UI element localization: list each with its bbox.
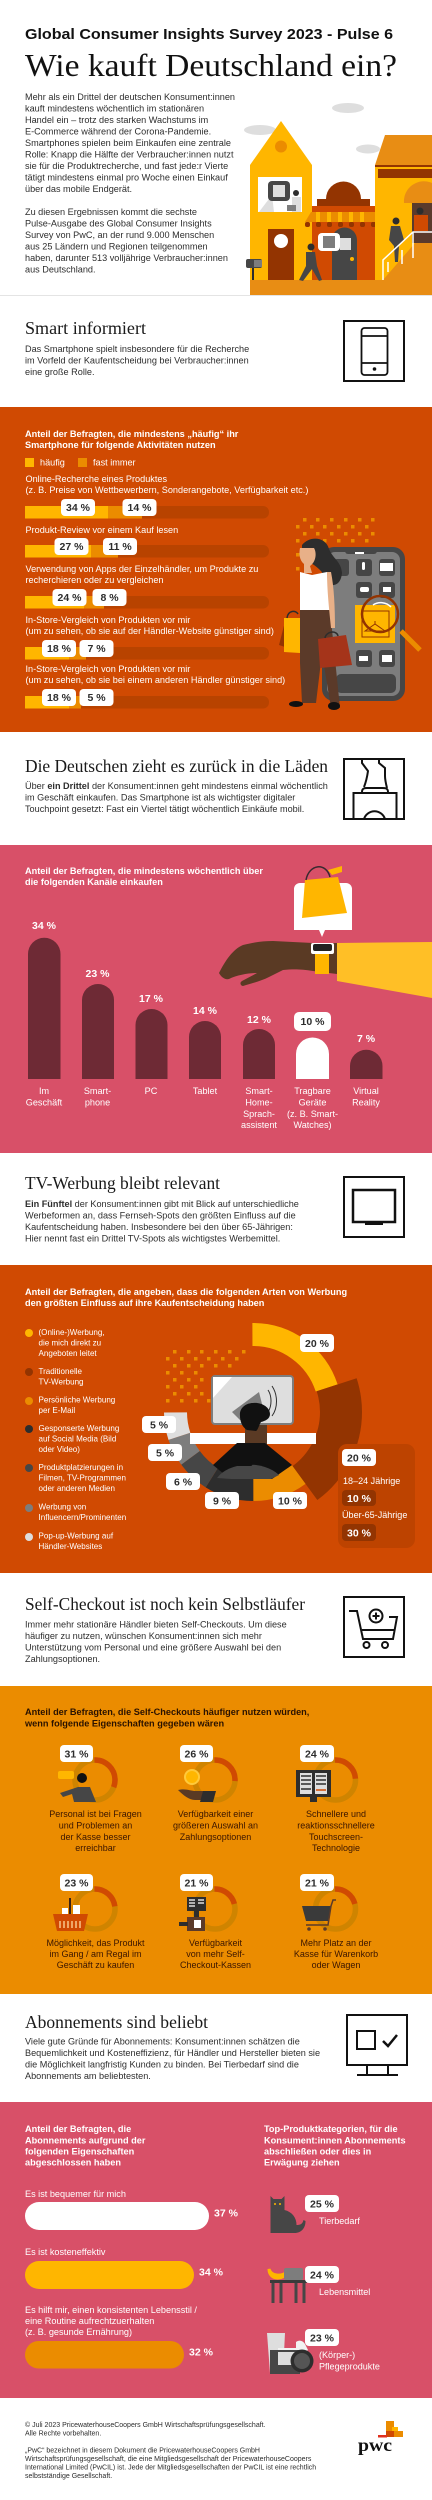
bar: convenience 37 %: Es ist bequemer für mich: [25, 2189, 126, 2199]
bar: cost effective 34 %: Es ist kosteneffektiv: [25, 2247, 106, 2257]
footer: legal notice: „PwC“ bezeichnet in diesem Dokument die PricewaterhouseCoopers GmbH: [25, 2448, 260, 2454]
bar chart: weekly channels: Reality: [352, 1098, 380, 1108]
text block: [25, 781, 328, 814]
text block: introduction: haben, darunter 513 volljährige Verbraucher:innen: [25, 253, 228, 263]
legend: advertising types: Filmen, TV-Programmen: [38, 1474, 126, 1482]
legend: advertising types: Werbung von: [38, 1502, 86, 1512]
bar chart: weekly channels: Im: [39, 1086, 49, 1096]
bar row: online research: Online-Recherche eines Produktes: [26, 474, 167, 484]
legend: advertising types: auf Social Media (Bild: [38, 1434, 116, 1444]
chart: advertising donut with person: [142, 1324, 341, 1509]
text block: introduction: Survey von PwC, an der rund 9.000 Menschen: [25, 230, 214, 240]
text block: Ein Fünftel der Konsument:innen gibt mit Blick auf unterschiedliche: [25, 1199, 299, 1209]
right heading: Erwägung ziehen: [264, 2158, 340, 2168]
heading: TV-Werbung bleibt relevant: [25, 1173, 220, 1193]
bar chart: weekly channels: phone: [85, 1098, 110, 1108]
panel heading: die folgenden Kanäle einkaufen: [25, 877, 163, 887]
item: buy in aisle 23 %: 23 %: [65, 1878, 89, 1890]
left heading: [25, 2124, 146, 2168]
panel: back to the stores: [25, 756, 404, 819]
text block: im Vorfeld der Kaufentscheidung bei Verbraucher:innen: [25, 356, 249, 366]
footer: legal notice: © Juli 2023 PricewaterhouseCoopers GmbH Wirtschaftsprüfungsgesellschaft.: [25, 2421, 266, 2429]
legend: advertising types: oder Video): [38, 1445, 80, 1454]
item: staff support 31 %: 31 %: [65, 1748, 89, 1760]
text block: Bequemlichkeit und Kosteneffizienz, für Händler und Hersteller bieten sie: [25, 2048, 320, 2058]
left heading: Anteil der Befragten, die: [25, 2124, 131, 2134]
heading: Smart informiert: [25, 318, 146, 338]
text block: häufiger zu nutzen, wünschen Konsument:innen sich mehr: [25, 1631, 262, 1641]
category: pet supplies with cat icon: 25 %: [310, 2198, 335, 2210]
bar: routine 32 %: 32 %: [189, 2346, 214, 2358]
bar chart: weekly channels: Virtual: [353, 1086, 379, 1096]
bar row: in-store comparison other retailer: (um zu sehen, ob sie bei einem anderen Händler günstiger sind): [26, 675, 285, 685]
legend: advertising types: TV-Werbung: [38, 1378, 84, 1386]
category: groceries with table icon: Lebensmittel: [319, 2287, 370, 2297]
panel heading: Anteil der Befragten, die mindestens wöchentlich über: [25, 866, 263, 876]
category: groceries with table icon: 24 %: [310, 2270, 335, 2282]
text block: introduction: [25, 92, 235, 274]
item: more space 21 %: Kasse für Warenkorb: [294, 1949, 378, 1959]
bar chart: weekly channels: 12 %: [247, 1014, 272, 1026]
bar chart: weekly channels: 10 %: [301, 1016, 325, 1028]
panel heading: Anteil der Befragten, die angeben, dass die folgenden Arten von Werbung: [25, 1287, 347, 1297]
bar chart: weekly channels: Smart-: [245, 1086, 273, 1096]
panel: advertising influence: [0, 1265, 432, 1573]
panel heading: wenn folgende Eigenschaften gegeben wären: [24, 1718, 224, 1728]
text block: Kaufentscheidung haben. Insbesondere bei den über 65-Jährigen:: [25, 1222, 293, 1232]
category: pet supplies with cat icon: [270, 2195, 360, 2233]
item: buy in aisle 23 %: Geschäft zu kaufen: [57, 1960, 134, 1970]
bar chart: weekly channels: Tablet: [193, 1086, 218, 1096]
footer: legal notice: Alle Rechte vorbehalten.: [25, 2430, 101, 2438]
chart: advertising donut with person: 10 %: [278, 1496, 303, 1508]
text block: introduction: tätigt mindestens einmal pro Woche einen Einkauf: [25, 172, 228, 182]
bar row: in-store comparison website: 18 %: [47, 643, 72, 655]
bar: convenience 37 %: [25, 2189, 239, 2230]
right heading: abschließen oder dies in: [264, 2146, 372, 2156]
illustration: shopping street: [244, 103, 432, 295]
bar row: product reviews: 27 %: [60, 541, 84, 553]
text block: Abonnements am beliebtesten.: [25, 2071, 151, 2081]
bar chart: weekly channels: Geräte: [299, 1098, 326, 1108]
legend: advertising types: Persönliche Werbung: [38, 1396, 115, 1404]
panel heading: [25, 1287, 347, 1308]
bar chart: weekly channels: (z. B. Smart-: [287, 1109, 338, 1119]
text block: Das Smartphone spielt insbesondere für die Recherche: [25, 344, 249, 354]
text block: introduction: Smartphones spielen beim Einkaufen eine zentrale: [25, 138, 231, 148]
panel heading: den größten Einfluss auf ihre Kaufentscheidung haben: [25, 1298, 265, 1308]
item: touchscreen 24 %: Schnellere und: [306, 1809, 366, 1819]
text block: [25, 1620, 287, 1664]
item: payment options 26 %: [173, 1745, 258, 1842]
bar chart: weekly channels: 7 %: [357, 1033, 376, 1045]
bar chart: weekly channels: assistent: [241, 1120, 277, 1130]
legend: advertising types: Influencern/Prominenten: [38, 1513, 126, 1522]
panel heading: [24, 1707, 309, 1728]
bar row: retailer apps: recherchieren oder zu vergleichen: [26, 575, 163, 585]
bar row: retailer apps: [25, 564, 269, 608]
icon: shop with bag: [344, 759, 404, 819]
bar chart: weekly channels: Smart-: [84, 1086, 111, 1096]
text block: im Geschäft einkaufen. Das Smartphone ist als wichtigster digitaler: [25, 792, 295, 802]
bar row: product reviews: 11 %: [108, 541, 132, 553]
panel: smartphone activities: [0, 407, 432, 732]
right heading: [264, 2124, 406, 2168]
item: payment options 26 %: 26 %: [185, 1748, 209, 1760]
item: staff support 31 %: und Problemen an: [59, 1820, 132, 1830]
panel heading: [25, 429, 239, 450]
bar row: online research: [25, 474, 308, 518]
footer: legal notice: selbstständige Gesellschaft.: [25, 2473, 112, 2480]
bar row: online research: 14 %: [128, 502, 152, 514]
item: more checkouts 21 %: Checkout-Kassen: [180, 1960, 251, 1970]
item: more space 21 %: 21 %: [305, 1878, 330, 1890]
legend: advertising types: Gesponserte Werbung: [38, 1424, 119, 1433]
legend: fast immer: [93, 458, 136, 468]
footer: legal notice: Wirtschaftsprüfungsgesellschaft, die eine Mitgliedsgesellschaft der PricewaterhouseCoopers: [25, 2456, 312, 2463]
heading: Die Deutschen zieht es zurück in die Läden: [25, 756, 328, 776]
item: touchscreen 24 %: reaktionsschnellere: [297, 1820, 375, 1830]
panel heading: Anteil der Befragten, die Self-Checkouts häufiger nutzen würden,: [25, 1707, 309, 1717]
item: more checkouts 21 %: 21 %: [185, 1878, 209, 1890]
legend: advertising types: per E-Mail: [38, 1406, 75, 1415]
right heading: Konsument:innen Abonnements: [264, 2136, 406, 2146]
category: care products with cosmetics icon: (Körper-): [319, 2350, 355, 2360]
text block: introduction: kauft mindestens wöchentlich im stationären: [25, 104, 204, 114]
item: payment options 26 %: größeren Auswahl an: [173, 1820, 258, 1830]
bar chart: weekly channels: Home-: [245, 1098, 273, 1108]
bar: routine 32 %: Es hilft mir, einen konsistenten Lebensstil /: [25, 2305, 197, 2315]
footer: legal notice: [25, 2421, 316, 2480]
panel: Smart informiert: [25, 318, 404, 381]
legend: advertising types: Pop-up-Werbung auf: [38, 1532, 114, 1540]
item: more checkouts 21 %: von mehr Self-: [186, 1949, 245, 1959]
item: staff support 31 %: der Kasse besser: [60, 1832, 131, 1842]
heading: Abonnements sind beliebt: [25, 2012, 208, 2032]
chart: advertising donut with person: 9 %: [213, 1496, 232, 1508]
panel: subscriptions: [25, 2012, 407, 2081]
heading: Self-Checkout ist noch kein Selbstläufer: [25, 1594, 305, 1614]
chart: advertising donut with person: 6 %: [174, 1476, 193, 1488]
text block: Über ein Drittel der Konsument:innen geht mindestens einmal wöchentlich: [25, 781, 328, 791]
item: more checkouts 21 %: [179, 1874, 251, 1970]
icon: monitor with checkbox: [347, 2015, 407, 2075]
text block: introduction: Mehr als ein Drittel der deutschen Konsument:innen: [25, 92, 235, 102]
chart: advertising donut with person: 5 %: [156, 1448, 175, 1460]
text block: Viele gute Gründe für Abonnements: Konsument:innen schätzen die: [25, 2036, 300, 2046]
text block: introduction: Rolle: Knapp die Hälfte der Verbraucher:innen nutzt: [25, 150, 234, 160]
footer: legal notice: International Limited (PwCIL) ist. Jede der Mitgliedsgesellschaften der PwCIL ist eine rechtlich: [25, 2464, 316, 2472]
legend: advertising types: Händler-Websites: [38, 1542, 102, 1551]
category: pet supplies with cat icon: Tierbedarf: [319, 2216, 360, 2226]
item: more space 21 %: oder Wagen: [312, 1960, 360, 1970]
bar row: product reviews: Produkt-Review vor einem Kauf lesen: [26, 525, 178, 535]
title: main heading: Wie kauft Deutschland ein?: [25, 47, 397, 83]
panel heading: Anteil der Befragten, die mindestens „häufig“ ihr: [25, 429, 239, 439]
bar chart: weekly channels: [26, 920, 382, 1130]
category: care products with cosmetics icon: 23 %: [310, 2332, 335, 2344]
text block: Hier nennt fast ein Drittel TV-Spots als wichtigstes Werbemittel.: [25, 1234, 280, 1244]
category: groceries with table icon: [269, 2266, 370, 2303]
callout: age breakdown: [338, 1444, 415, 1548]
bar row: in-store comparison other retailer: In-Store-Vergleich von Produkten vor mir: [26, 664, 190, 674]
text block: introduction: über das mobile Endgerät.: [25, 184, 132, 194]
bar: cost effective 34 %: 34 %: [199, 2266, 224, 2278]
logo: PwC: pwc: [358, 2435, 392, 2455]
legend: advertising types: Produktplatzierungen in: [38, 1463, 123, 1472]
text block: introduction: aus 25 Ländern und Regionen teilgenommen: [25, 242, 208, 252]
panel: self-checkout properties: [0, 1686, 432, 1994]
icon: smartphone: [344, 321, 404, 381]
panel heading: Smartphone für folgende Aktivitäten nutzen: [25, 440, 216, 450]
left heading: abgeschlossen haben: [25, 2158, 121, 2168]
item: payment options 26 %: Verfügbarkeit einer: [178, 1809, 253, 1819]
text block: Unterstützung vom Personal und eine größere Auswahl bei den: [25, 1642, 281, 1652]
category: care products with cosmetics icon: Pflegeprodukte: [319, 2362, 380, 2372]
logo: PwC: [358, 2421, 403, 2455]
bar row: in-store comparison website: In-Store-Vergleich von Produkten vor mir: [26, 615, 190, 625]
bar row: product reviews: [25, 525, 269, 558]
panel: introduction header: [25, 27, 432, 295]
bar row: retailer apps: 24 %: [58, 592, 82, 604]
bar chart: weekly channels: 17 %: [139, 993, 164, 1005]
item: touchscreen 24 %: Touchscreen-: [309, 1832, 363, 1842]
text block: Werbeformen an, dass Fernseh-Spots den größten Einfluss auf die: [25, 1210, 296, 1220]
right heading: Top-Produktkategorien, für die: [264, 2124, 398, 2134]
item: payment options 26 %: Zahlungsoptionen: [180, 1832, 251, 1842]
chart: advertising donut with person: 5 %: [150, 1420, 169, 1432]
bar row: online research: (z. B. Preise von Wettbewerbern, Sonderangebote, Verfügbarkeit etc.): [26, 485, 308, 495]
title: survey name: Global Consumer Insights Survey 2023 - Pulse 6: [25, 27, 393, 43]
item: buy in aisle 23 %: [46, 1874, 145, 1970]
icon: television: [344, 1177, 404, 1237]
item: more space 21 %: Mehr Platz an der: [300, 1938, 372, 1948]
divider rule: [0, 295, 432, 296]
item: more checkouts 21 %: Verfügbarkeit: [189, 1938, 243, 1948]
bar row: in-store comparison other retailer: [25, 664, 285, 708]
item: buy in aisle 23 %: im Gang / am Regal im: [49, 1949, 142, 1959]
bar row: retailer apps: Verwendung von Apps der Einzelhändler, um Produkte zu: [26, 564, 258, 574]
item: buy in aisle 23 %: Möglichkeit, das Produkt: [46, 1938, 145, 1948]
bar row: in-store comparison other retailer: 5 %: [87, 692, 106, 704]
left heading: folgenden Eigenschaften: [25, 2146, 135, 2156]
bar chart: weekly channels: Watches): [293, 1120, 332, 1130]
text block: eine große Rolle.: [25, 367, 94, 377]
text block: introduction: sie für die Produktrecherche, und fast jede:r Vierte: [25, 161, 228, 171]
legend: advertising types: oder anderen Medien: [38, 1484, 115, 1493]
category: care products with cosmetics icon: [267, 2329, 380, 2374]
legend: advertising types: die mich direkt zu: [38, 1338, 101, 1348]
item: staff support 31 %: Personal ist bei Fragen: [49, 1809, 142, 1819]
legend: advertising types: Traditionelle: [38, 1367, 83, 1376]
bar row: in-store comparison website: [25, 615, 274, 660]
panel: self-checkout: [25, 1594, 404, 1664]
bar chart: weekly channels: Tragbare: [294, 1086, 331, 1096]
left heading: Abonnements aufgrund der: [25, 2136, 146, 2146]
bar: convenience 37 %: 37 %: [214, 2208, 239, 2220]
bar chart: weekly channels: Geschäft: [26, 1098, 63, 1108]
bar: routine 32 %: (z. B. gesunde Ernährung): [25, 2327, 132, 2337]
illustration: woman with phone: [279, 518, 420, 710]
bar row: in-store comparison website: (um zu sehen, ob sie auf der Händler-Website günstiger sind): [26, 626, 274, 636]
bar chart: weekly channels: Sprach-: [243, 1109, 275, 1119]
text block: [25, 344, 249, 377]
text block: introduction: Zu diesen Ergebnissen kommt die sechste: [25, 207, 197, 217]
panel heading: [25, 866, 263, 887]
text block: [25, 2036, 320, 2081]
text block: Zahlungsoptionen.: [25, 1654, 100, 1664]
item: touchscreen 24 %: Technologie: [312, 1843, 360, 1853]
item: staff support 31 %: [49, 1745, 142, 1853]
chart: advertising donut with person: 20 %: [305, 1338, 330, 1350]
callout: age breakdown: 18–24 Jährige: [343, 1476, 400, 1486]
bar chart: weekly channels: 14 %: [193, 1005, 218, 1017]
bar chart: weekly channels: 23 %: [86, 968, 110, 980]
item: more space 21 %: [294, 1874, 378, 1970]
bar row: in-store comparison website: 7 %: [87, 643, 106, 655]
legend: advertising types: Angeboten leitet: [38, 1349, 97, 1358]
legend: häufig: [40, 458, 65, 468]
legend: advertising types: (Online-)Werbung,: [38, 1328, 105, 1337]
text block: introduction: Handel ein – trotz des starken Wachstums im: [25, 115, 208, 125]
callout: age breakdown: 30 %: [347, 1528, 372, 1540]
text block: introduction: aus Deutschland.: [25, 264, 96, 274]
text block: [25, 1199, 299, 1244]
text block: die Möglichkeit langfristig Kunden zu binden. Bei Tierbedarf sind die: [25, 2060, 299, 2070]
callout: age breakdown: Über-65-Jährige: [342, 1510, 407, 1520]
panel: subscription reasons and categories: [0, 2102, 432, 2398]
panel: weekly purchase channels: [0, 845, 432, 1153]
item: touchscreen 24 %: [296, 1745, 375, 1853]
callout: age breakdown: 20 %: [347, 1452, 372, 1464]
text block: Immer mehr stationäre Händler bieten Self-Checkouts. Um diese: [25, 1620, 287, 1630]
bar: routine 32 %: eine Routine aufrechtzuerhalten: [25, 2316, 154, 2326]
item: touchscreen 24 %: 24 %: [305, 1748, 330, 1760]
panel: TV advertising: [25, 1173, 404, 1244]
bar row: online research: 34 %: [66, 502, 91, 514]
bar row: retailer apps: 8 %: [100, 592, 119, 604]
text block: Touchpoint gesetzt: Fast ein Viertel tätigt wöchentlich Einkäufe mobil.: [25, 804, 304, 814]
bar: cost effective 34 %: [25, 2247, 224, 2289]
bar chart: weekly channels: 34 %: [32, 920, 57, 932]
text block: introduction: E-Commerce während der Corona-Pandemie.: [25, 126, 211, 136]
text block: introduction: Pulse-Ausgabe des Global Consumer Insights: [25, 218, 212, 228]
bar row: in-store comparison other retailer: 18 %: [47, 692, 72, 704]
illustration: hand with smartwatch and bag: [219, 866, 432, 998]
legend: advertising types: [25, 1328, 126, 1551]
item: staff support 31 %: erreichbar: [75, 1843, 116, 1853]
icon: shopping cart: [344, 1597, 404, 1657]
legend: [25, 458, 136, 468]
bar chart: weekly channels: PC: [145, 1086, 158, 1096]
bar: routine 32 %: [25, 2305, 214, 2368]
callout: age breakdown: 10 %: [347, 1493, 372, 1505]
